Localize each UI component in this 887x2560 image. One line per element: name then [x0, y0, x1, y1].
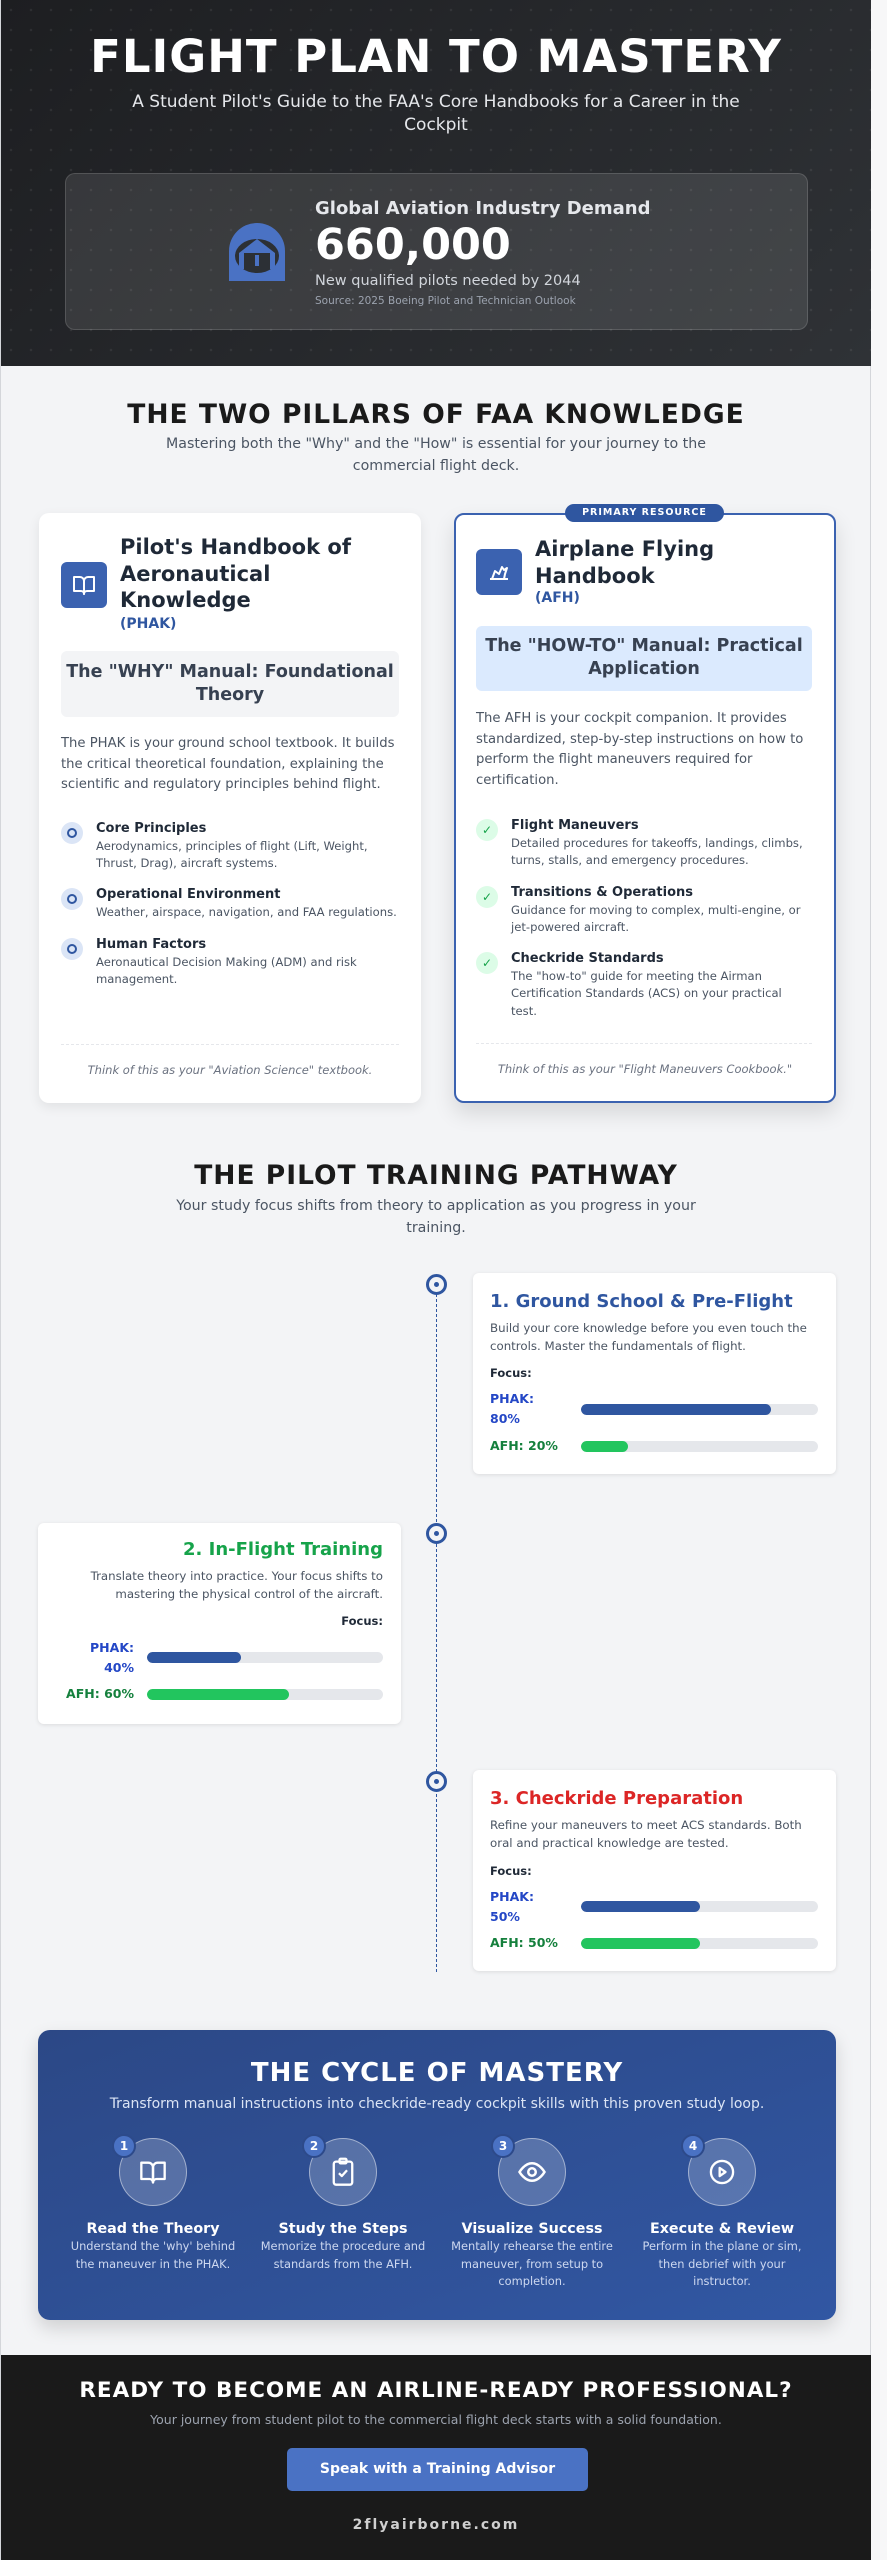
stat text: Source: 2025 Boeing Pilot and Technician Outlook	[315, 295, 576, 307]
panel: PHAK card	[39, 513, 421, 1103]
panel: step 2	[38, 1523, 401, 1724]
stat box	[65, 173, 808, 330]
title: FLIGHT PLAN TO MASTERY	[90, 30, 782, 83]
how box: The "HOW-TO" Manual: Practical Application	[485, 636, 803, 679]
panel: step 2: 2. In-Flight Training	[183, 1539, 383, 1560]
icon: aviation	[229, 223, 285, 281]
list item: operational environment: Weather, airspace, navigation, and FAA regulations.	[96, 904, 397, 918]
list item: operational environment: Operational Environment	[96, 887, 280, 902]
card title: Airplane Flying Handbook	[535, 537, 714, 588]
list item: operational environment	[61, 887, 397, 918]
list item: flight maneuvers: ✓	[482, 823, 492, 837]
step: study the steps: Study the Steps	[278, 2221, 408, 2237]
step: read the theory: Read the Theory	[86, 2221, 220, 2237]
how box	[476, 626, 812, 691]
step: execute & review	[643, 2134, 801, 2288]
footer CTA: Your journey from student pilot to the commercial flight deck starts with a solid foundation.	[150, 2412, 722, 2427]
bar chart: step 1: PHAK:	[490, 1391, 534, 1406]
panel: AFH card: (AFH)	[535, 590, 580, 606]
panel: step 3: Focus:	[490, 1864, 532, 1878]
bar chart: step 3: PHAK:	[490, 1889, 534, 1904]
section subtitle: Mastering both the "Why" and the "How" is essential for your journey to the commercial flight deck.	[166, 436, 706, 474]
panel: step 3: Refine your maneuvers to meet ACS standards. Both oral and practical knowledge are tested.	[490, 1818, 802, 1850]
list item: flight maneuvers: Detailed procedures for takeoffs, landings, climbs, turns, stalls, and emergency procedures.	[511, 836, 803, 867]
bar chart: step 3: AFH: 50%	[490, 1935, 558, 1950]
list item: human factors: Human Factors	[96, 937, 206, 952]
list item: transitions: ✓	[482, 890, 492, 904]
step: study the steps: Memorize the procedure and standards from the AFH.	[261, 2239, 425, 2270]
step: read the theory	[71, 2136, 235, 2270]
why box	[61, 651, 399, 717]
list item: transitions	[476, 885, 800, 934]
list item: flight maneuvers	[476, 818, 803, 867]
domain: 2flyairborne.com	[353, 2517, 519, 2533]
panel: cycle of mastery	[38, 2030, 836, 2320]
section title: pathway: THE PILOT TRAINING PATHWAY	[194, 1160, 678, 1191]
panel: step 2: Focus:	[341, 1614, 383, 1628]
icon: book	[61, 562, 107, 608]
bar chart: step 2: AFH: 60%	[66, 1686, 134, 1701]
panel: step 3	[473, 1770, 836, 1971]
card title: Pilot's Handbook of Aeronautical Knowledge	[120, 535, 351, 612]
bar chart: step 1: AFH: 20%	[490, 1438, 558, 1453]
list item: transitions: Transitions & Operations	[511, 885, 693, 900]
section title: two pillars: THE TWO PILLARS OF FAA KNOWLEDGE	[127, 399, 745, 430]
list item: checkride standards	[476, 951, 782, 1018]
badge	[565, 504, 724, 522]
panel: cycle of mastery: Transform manual instructions into checkride-ready cockpit skills with this proven study loop.	[110, 2096, 764, 2112]
step: read the theory: 1	[120, 2139, 128, 2153]
list item: human factors: Aeronautical Decision Making (ADM) and risk management.	[96, 954, 357, 986]
why box: The "WHY" Manual: Foundational Theory	[66, 662, 394, 705]
panel: cycle of mastery: THE CYCLE OF MASTERY	[251, 2058, 623, 2088]
stat text	[315, 198, 650, 307]
timeline line	[436, 1284, 437, 1972]
list item: checkride standards: Checkride Standards	[511, 951, 664, 966]
footer CTA: READY TO BECOME AN AIRLINE-READY PROFESSIONAL?	[79, 2378, 793, 2403]
panel: step 1: Build your core knowledge before you even touch the controls. Master the fundamentals of flight.	[490, 1321, 807, 1353]
step: execute & review: Perform in the plane or sim, then debrief with your instructor.	[643, 2239, 801, 2288]
stat text: 660,000	[315, 220, 511, 270]
step: visualize success: 3	[499, 2139, 507, 2153]
header	[1, 0, 871, 366]
timeline node 3	[426, 1771, 447, 1792]
bar chart: step 3: 50%	[490, 1909, 520, 1924]
icon: plane	[476, 549, 522, 595]
subtitle: A Student Pilot's Guide to the FAA's Core Handbooks for a Career in the Cockpit	[132, 92, 740, 135]
stat text: New qualified pilots needed by 2044	[315, 273, 581, 289]
timeline node 2	[426, 1523, 447, 1544]
panel: step 2: Translate theory into practice. Your focus shifts to mastering the physical control of the aircraft.	[91, 1569, 383, 1601]
list item: flight maneuvers: Flight Maneuvers	[511, 818, 639, 833]
list item: human factors	[61, 937, 357, 986]
step: study the steps: 2	[310, 2139, 318, 2153]
list item: checkride standards: The "how-to" guide for meeting the Airman Certification Standards (ACS) on your practical test.	[511, 968, 782, 1018]
button	[287, 2448, 588, 2491]
footer CTA	[1, 2355, 871, 2560]
description: The AFH is your cockpit companion. It provides standardized, step-by-step instructions on how to perform the flight maneuvers required for certification.	[476, 711, 803, 788]
step: read the theory: Understand the 'why' behind the maneuver in the PHAK.	[71, 2239, 235, 2270]
button: Speak with a Training Advisor	[320, 2461, 555, 2477]
bar chart: step 2: 40%	[104, 1660, 134, 1675]
list item: core principles	[61, 821, 368, 870]
list item: core principles: Aerodynamics, principles of flight (Lift, Weight, Thrust, Drag), aircraft systems.	[96, 838, 368, 870]
panel: PHAK card: (PHAK)	[120, 616, 176, 632]
footer note: Think of this as your "Flight Maneuvers Cookbook."	[498, 1062, 792, 1076]
footer note: Think of this as your "Aviation Science" textbook.	[88, 1063, 372, 1077]
list item: transitions: Guidance for moving to complex, multi-engine, or jet-powered aircraft.	[511, 902, 800, 934]
stat text: Global Aviation Industry Demand	[315, 198, 650, 219]
step: visualize success	[451, 2134, 613, 2288]
list item: core principles: Core Principles	[96, 821, 206, 836]
badge: PRIMARY RESOURCE	[582, 507, 707, 518]
panel: AFH card	[454, 513, 836, 1103]
step: visualize success: Visualize Success	[462, 2221, 602, 2237]
step: execute & review: Execute & Review	[650, 2221, 794, 2237]
step: study the steps	[261, 2136, 425, 2270]
panel: step 1: 1. Ground School & Pre-Flight	[490, 1291, 793, 1312]
panel: step 1	[473, 1273, 836, 1474]
panel: step 3: 3. Checkride Preparation	[490, 1788, 743, 1809]
step: visualize success: Mentally rehearse the entire maneuver, from setup to completion.	[451, 2239, 613, 2288]
bar chart: step 3	[490, 1889, 818, 1950]
bar chart: step 1	[490, 1391, 818, 1453]
timeline node 1	[426, 1274, 447, 1295]
description: The PHAK is your ground school textbook. It builds the critical theoretical foundation, explaining the scientific and regulatory principles behind flight.	[61, 736, 394, 792]
section subtitle: Your study focus shifts from theory to application as you progress in your training.	[176, 1198, 696, 1236]
step: execute & review: 4	[689, 2139, 697, 2153]
bar chart: step 2	[66, 1640, 383, 1701]
panel: step 1: Focus:	[490, 1366, 532, 1380]
bar chart: step 1: 80%	[490, 1411, 520, 1426]
bar chart: step 2: PHAK:	[90, 1640, 134, 1655]
list item: checkride standards: ✓	[482, 956, 492, 970]
